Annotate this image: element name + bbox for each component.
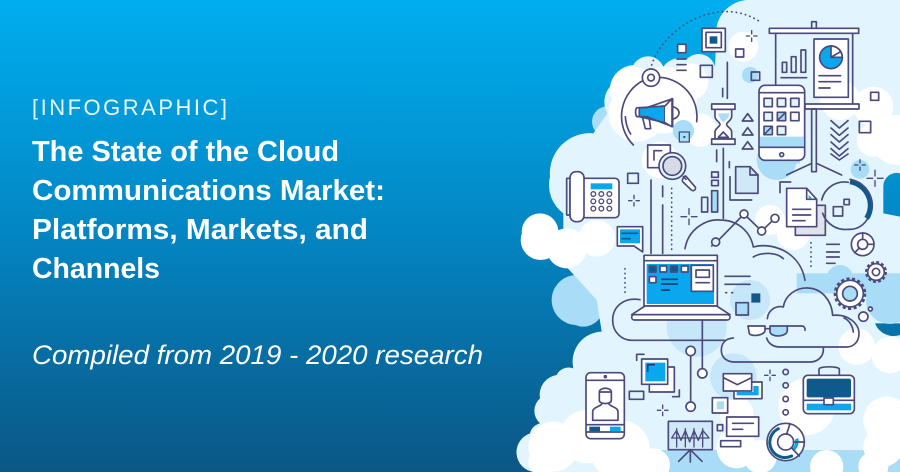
icon: triangles	[742, 114, 753, 149]
icon: connector lines and nodes	[625, 243, 839, 411]
icon: documents	[730, 167, 758, 200]
icon: gears	[836, 263, 885, 321]
icon: laptop	[632, 255, 730, 320]
icon: hourglass	[712, 104, 735, 144]
eyebrow label: [INFOGRAPHIC]	[32, 95, 227, 120]
scattered squares	[628, 44, 879, 253]
icon: large outlined cloud	[613, 220, 805, 340]
title	[32, 136, 385, 285]
icon: stacked photos	[637, 354, 679, 397]
title: Channels	[32, 253, 160, 285]
icon: small bars	[702, 172, 718, 212]
icon: document with bracket	[780, 182, 825, 235]
cloud backdrop	[516, 0, 900, 472]
icon: magnifying glass	[648, 145, 696, 191]
dotted arc	[652, 12, 758, 65]
icon: presentation easel	[668, 421, 712, 462]
title: Platforms, Markets, and	[32, 214, 368, 246]
subtitle: Compiled from 2019 - 2020 research	[32, 340, 483, 370]
icon: envelopes	[723, 374, 762, 399]
icon: donut with squares	[822, 179, 872, 230]
icon: briefcase	[803, 367, 854, 414]
icon: small outlined cloud with glasses	[721, 288, 859, 362]
icon: sparkles	[629, 31, 883, 416]
icon: small donut	[851, 233, 874, 256]
icon: megaphone in ring	[622, 69, 697, 145]
icon: smartphone with contact	[586, 373, 644, 439]
icon: desk telephone	[567, 172, 619, 222]
icon: small tile	[712, 398, 728, 413]
icon: small blue square	[679, 132, 689, 142]
icon: chat bubble	[617, 227, 643, 252]
icon: nested square	[702, 28, 725, 52]
title: Communications Market:	[32, 175, 385, 207]
cloud illustration	[516, 0, 900, 472]
icon: note cards	[717, 417, 759, 447]
icon: small data squares	[736, 294, 760, 315]
icon: chevrons	[831, 121, 848, 160]
dotted node column	[783, 369, 788, 415]
icon: donut chart	[767, 423, 804, 461]
icon: tablet	[759, 85, 805, 160]
title: The State of the Cloud	[32, 136, 339, 168]
icon: presentation board with chart	[769, 22, 859, 175]
icon: trend line	[712, 210, 779, 246]
